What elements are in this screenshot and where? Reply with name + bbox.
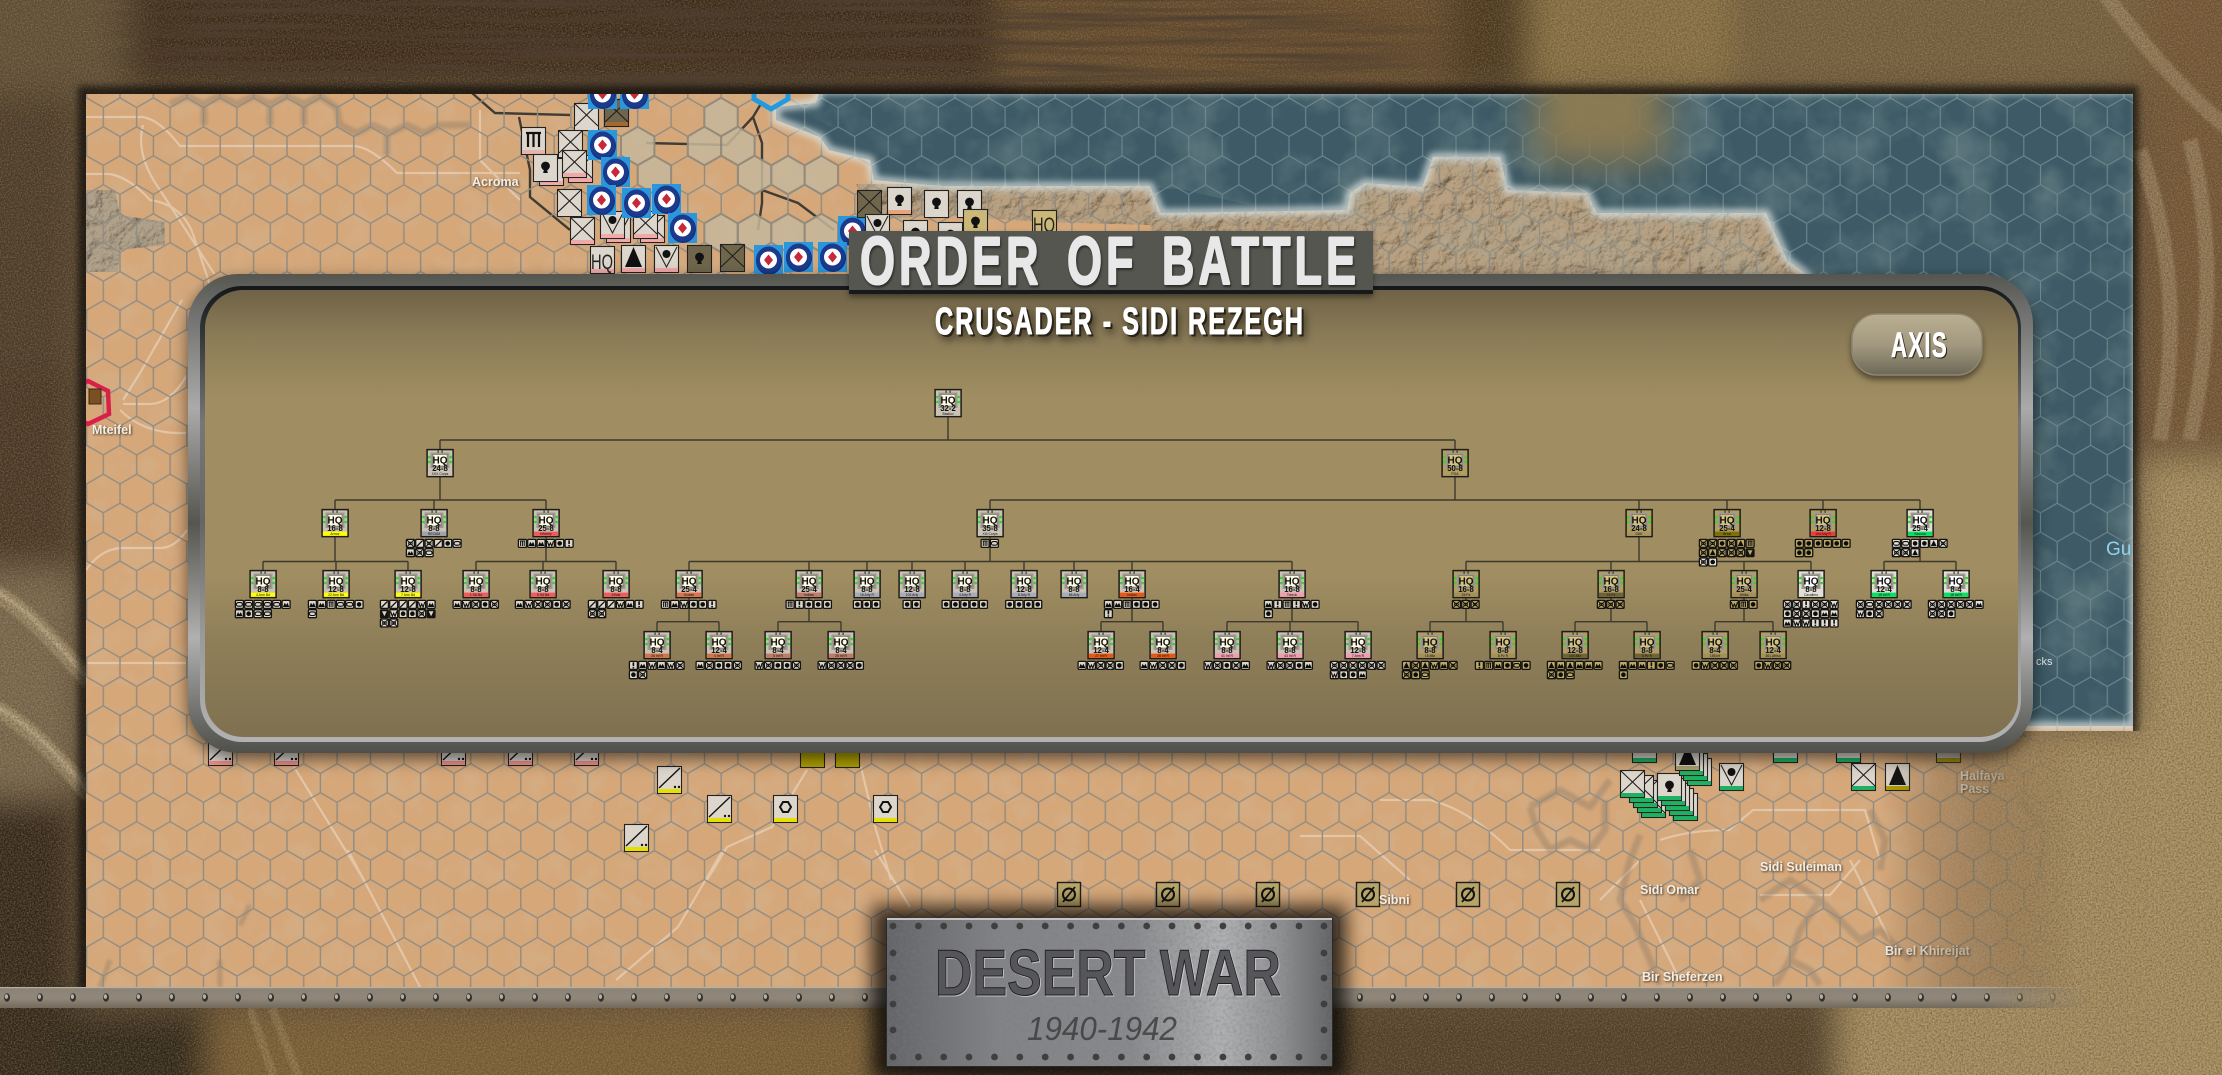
HQ 8-8 Cavallero: HQ: [1804, 576, 1819, 588]
map: sea mottling: [770, 94, 2133, 726]
HQ 8-4 NZ brigade: 26 Inf R: [651, 654, 663, 658]
bottom riveted metal rail: [0, 987, 2222, 1008]
HQ 8-4 155th regiment: [1692, 632, 1737, 669]
HQ 8-8 SA support: [588, 571, 643, 618]
HQ 12-8 arty: 12-8: [904, 585, 920, 594]
HQ 12-4 361st regiment: [1755, 632, 1791, 669]
heading: order of battle: [849, 223, 1373, 299]
HQ 8-8 Tobruk brigade: HQ: [1282, 638, 1298, 648]
HQ 25-8 infantry with units: [518, 510, 573, 547]
HQ 35-8 XIII Corps: [977, 510, 1003, 547]
HQ 12-4 NZ brigade: 4 Inf R: [714, 654, 725, 658]
map: place names: Bir el Khireijat: [1885, 944, 1971, 958]
HQ 16-8 21st Panzer: HQ: [1604, 576, 1619, 588]
HQ 16-4 Freyberg: [1104, 571, 1159, 618]
HQ 8-4 Savona infantry: 8-4: [1950, 585, 1962, 594]
HQ 24-8 Afrika Korps: [1626, 510, 1652, 537]
map: desert ground: [86, 94, 2133, 987]
HQ 8-4 Savona infantry: [1928, 571, 1983, 618]
HQ 8-4 NZ brigade: HQ: [650, 638, 665, 648]
map: place names: Sidi Suleiman: [1760, 860, 1842, 874]
org chart: third echelon: [322, 510, 1947, 566]
HQ 8-8 8th Panzer regiment: HQ: [1496, 638, 1511, 648]
HQ 8-4 Indian brigade: [1140, 632, 1185, 669]
HQ 16-8 Tobruk: HQ: [1284, 576, 1300, 588]
HQ 8-8 1 SA Bde: 8-8: [470, 585, 482, 594]
HQ 12-8 7 Arm Bde: 7 Arm Bd: [401, 593, 415, 597]
button: axis: AXIS: [1891, 326, 1948, 365]
HQ 8-8 arty: 68 Arty: [1069, 593, 1080, 597]
HQ 12-8 7 Arm Bde: HQ: [400, 576, 416, 588]
org chart: fourth echelon, allied west: [235, 571, 643, 627]
heading: order of battle: ORDER OF BATTLE: [860, 223, 1360, 299]
HQ 16-8 15th Panzer: 15.Pz: [1462, 593, 1471, 597]
HQ 8-8 15th Panzer regiment: 8-8: [1424, 646, 1436, 655]
HQ 12-8 Tobruk armor: 7 Arm R: [1352, 654, 1365, 658]
HQ 24-8 XXX Corps: 24-8: [432, 464, 448, 473]
HQ 25-4 Afrika division: Afrika: [1740, 593, 1748, 597]
HQ 12-8 104th regiment: 12-8: [1567, 646, 1583, 655]
HQ 8-8 5 SA Bde: 8-8: [537, 585, 549, 594]
HQ 8-8 SA support: HQ: [608, 576, 624, 588]
HQ 12-4 NZ brigade: 12-4: [711, 646, 727, 655]
map: Italian slash and garrison counters: [624, 766, 898, 852]
map: sea: [776, 90, 2140, 726]
HQ 25-8 infantry with units: 25-8: [538, 524, 554, 533]
HQ 12-4 Savona infantry: [1856, 571, 1911, 618]
HQ 8-4 NZ brigade: 8-4: [772, 646, 784, 655]
HQ 50-8 Panzer Group: PGA: [1451, 472, 1459, 476]
HQ 8-8 4 Arm Bde: [235, 571, 290, 618]
org chart: fifth echelon, axis: [1402, 632, 1791, 679]
HQ 12-4 361st regiment: 12-4: [1765, 646, 1781, 655]
HQ 25-4 New Zealand: Scobie: [684, 593, 694, 597]
HQ 16-4 Freyberg: HQ: [1124, 576, 1140, 588]
HQ 8-8 arty: 8-8: [1068, 585, 1080, 594]
HQ 32-2 army command: 32-2: [940, 404, 956, 413]
map: Allied and Axis counters around Tobruk: HQ: [591, 251, 613, 274]
HQ 8-8 arty: [853, 571, 880, 608]
HQ 8-8 8th Panzer regiment: 8.Pz R: [1498, 654, 1509, 658]
HQ 12-8 7 Arm Bde: 12-8: [400, 585, 416, 594]
HQ 24-8 XXX Corps: [427, 450, 453, 477]
HQ 8-8 SA support: 8-8: [610, 585, 622, 594]
HQ 12-8 with units: 104 Arty R: [1815, 532, 1831, 536]
HQ 12-4 Indian brigade: [1078, 632, 1123, 669]
HQ 8-4 Indian brigade: 8-4: [1157, 646, 1169, 655]
HQ 8-4 155th regiment: 155.Inf: [1710, 654, 1720, 658]
map: Allied and Axis counters around Tobruk: [522, 79, 1056, 275]
HQ 8-8 5th Panzer regiment: 8-8: [1641, 646, 1653, 655]
org chart: fourth echelon, XIII Corps: [661, 571, 1319, 618]
HQ 8-8 arty: [942, 571, 987, 608]
HQ 8-4 NZ brigade: 8-4: [835, 646, 847, 655]
HQ 12-8 104th regiment: 104.Mtz: [1569, 654, 1581, 658]
map: rough sandy hexes: [621, 98, 838, 252]
HQ 8-8 Cavallero: Cavallero: [1804, 593, 1818, 597]
map: ground mottling: [86, 94, 1925, 987]
HQ 25-4 New Zealand: 25-4: [681, 585, 697, 594]
HQ 8-8 4 Arm Bde: 4 Arm Bd: [256, 593, 270, 597]
HQ 12-8 22 Arm Bde: HQ: [328, 576, 344, 588]
HQ 8-4 155th regiment: 8-4: [1709, 646, 1721, 655]
HQ 8-8 arty: HQ: [860, 576, 875, 588]
map: place names: Halfaya: [1960, 769, 2006, 783]
map: row of axis fort counters: [1058, 882, 1580, 906]
HQ 8-8 Tobruk brigade: [1204, 632, 1249, 669]
HQ 8-8 Recon with units: [406, 510, 461, 557]
HQ 8-8 Tobruk brigade: 8-8: [1221, 646, 1233, 655]
HQ 8-8 Recon with units: 8-8: [428, 524, 440, 533]
HQ 32-2 army command: HQ: [940, 396, 956, 406]
HQ 12-8 arty: HQ: [1016, 576, 1032, 588]
HQ 16-8 Tobruk: Tobruk: [1287, 593, 1297, 597]
HQ 12-8 arty: 8 Arty R: [1018, 593, 1031, 597]
HQ 8-4 NZ brigade: [629, 632, 684, 679]
button: axis: [1852, 314, 1982, 375]
map: place names: cks: [2036, 656, 2053, 668]
HQ 16-8 Armor: Armor: [330, 532, 340, 536]
map: place names: Bir Sheferzen: [1642, 970, 1723, 984]
HQ 12-4 361st regiment: 361.Afrika: [1765, 654, 1781, 658]
HQ 8-8 15th Panzer regiment: 15.Mtz: [1425, 654, 1435, 658]
map: place names: Mteifel: [92, 423, 132, 437]
HQ 16-8 Tobruk: [1264, 571, 1319, 618]
HQ 8-4 Indian brigade: HQ: [1156, 638, 1171, 648]
HQ 12-8 104th regiment: [1547, 632, 1602, 679]
HQ 12-8 arty: HQ: [904, 576, 920, 588]
HQ 8-8 1 SA Bde: 1 SA Bd: [470, 593, 482, 597]
HQ 25-4 brigade: HQ: [802, 576, 817, 588]
org chart: fourth echelon, axis: [1452, 571, 1983, 627]
HQ 8-8 8th Panzer regiment: 8-8: [1497, 646, 1509, 655]
HQ 12-4 Savona infantry: HQ: [1876, 576, 1892, 588]
HQ 8-4 155th regiment: HQ: [1708, 638, 1723, 648]
panel: tan surface: [205, 290, 2018, 737]
org chart: army group and corps: [427, 390, 1468, 477]
map: escarpment ridges: [100, 96, 2045, 987]
map: worn burlap patch over the sea: [1535, 60, 1665, 165]
HQ 8-8 Tobruk brigade: [1267, 632, 1312, 669]
map: place names: Sidi Omar: [1640, 883, 1699, 897]
HQ 32-2 army command: Bastico: [942, 412, 954, 416]
HQ 24-8 Afrika Korps: HQ: [1632, 516, 1647, 526]
HQ 50-8 Panzer Group: 50-8: [1447, 464, 1463, 473]
HQ 8-8 5th Panzer regiment: HQ: [1640, 638, 1655, 648]
HQ 25-8 infantry with units: Infantry: [540, 532, 552, 536]
HQ 8-8 Tobruk brigade: 8-8: [1284, 646, 1296, 655]
HQ 16-8 15th Panzer: 16-8: [1458, 585, 1474, 594]
HQ 8-8 arty: 16 Arty R: [860, 593, 875, 597]
HQ 8-4 NZ brigade: 5 Inf R: [773, 654, 784, 658]
map: land hex grid: [86, 94, 2133, 987]
map: counters partly hidden under the panel: [208, 696, 860, 768]
HQ 12-4 361st regiment: HQ: [1766, 638, 1781, 648]
map: place names: Acroma: [472, 175, 520, 189]
map edge shadow: [78, 86, 2138, 991]
HQ 12-4 Indian brigade: 12-4: [1093, 646, 1109, 655]
HQ 8-8 arty: HQ: [1066, 576, 1082, 588]
plate rivets: [890, 923, 1327, 1060]
HQ 12-8 Tobruk armor: 12-8: [1350, 646, 1366, 655]
HQ 25-4 New Zealand: [661, 571, 716, 608]
HQ 8-4 NZ brigade: HQ: [834, 638, 849, 648]
HQ 12-8 7 Arm Bde: [380, 571, 435, 627]
HQ 35-8 XIII Corps: XIII Corps: [982, 532, 998, 536]
map: Allied and Axis counters around Tobruk: HQ: [1033, 214, 1055, 237]
HQ 12-8 with units: 12-8: [1815, 524, 1831, 533]
HQ 8-4 Savona infantry: 16 Inf R: [1950, 593, 1962, 597]
HQ 16-4 Freyberg: 16-4: [1124, 585, 1140, 594]
HQ 16-8 15th Panzer: HQ: [1458, 576, 1474, 588]
map: rocky coastal plateau: [856, 157, 1806, 274]
HQ 32-2 army command: [935, 390, 961, 417]
HQ 25-4 Italian armor with units: HQ: [1720, 516, 1735, 526]
HQ 8-4 NZ brigade: [755, 632, 800, 669]
HQ 12-8 arty: [899, 571, 925, 608]
HQ 16-8 Armor: HQ: [328, 516, 343, 526]
HQ 8-8 5th Panzer regiment: 5.Pz R: [1642, 654, 1653, 658]
HQ 12-8 22 Arm Bde: [308, 571, 363, 618]
panel: inner rim: [200, 286, 2021, 742]
HQ 12-8 Tobruk armor: HQ: [1350, 638, 1366, 648]
date text: 1940-1942: 1940-1942: [1027, 1010, 1177, 1047]
HQ 8-4 NZ brigade: 8-4: [651, 646, 663, 655]
HQ 12-8 arty: [1006, 571, 1042, 608]
HQ 12-4 Indian brigade: HQ: [1094, 638, 1109, 648]
panel: metal bezel: [188, 274, 2033, 753]
HQ 8-8 arty: 8-8: [861, 585, 873, 594]
HQ 8-8 1 SA Bde: HQ: [468, 576, 484, 588]
HQ 12-8 with units: HQ: [1816, 516, 1831, 526]
HQ 12-8 Tobruk armor: [1330, 632, 1385, 679]
HQ 16-8 21st Panzer: 16-8: [1603, 585, 1619, 594]
map: shoreline surf: [776, 90, 2140, 726]
HQ 25-4 Afrika division: 25-4: [1736, 585, 1752, 594]
HQ 8-8 Recon with units: HQ: [426, 516, 442, 526]
HQ 24-8 XXX Corps: XXX Corps: [432, 472, 449, 476]
map: place names: Pass: [1960, 782, 1989, 796]
HQ 8-8 Recon with units: RECAM: [428, 532, 440, 536]
HQ 24-8 Afrika Korps: 24-8: [1631, 524, 1647, 533]
map: place names: Sibni: [1379, 893, 1410, 907]
HQ 8-8 Tobruk brigade: 43 Inf R: [1284, 654, 1296, 658]
HQ 8-8 4 Arm Bde: HQ: [256, 576, 271, 588]
HQ 8-4 Savona infantry: HQ: [1948, 576, 1964, 588]
HQ 24-8 XXX Corps: HQ: [432, 456, 448, 466]
HQ 16-8 21st Panzer: [1597, 571, 1624, 608]
logo plate: Desert War 1940-1942: [872, 906, 1346, 1075]
map: port marker: [754, 70, 788, 109]
HQ 8-8 5 SA Bde: HQ: [536, 576, 551, 588]
HQ 25-4 brigade: 25-4: [801, 585, 817, 594]
HQ 35-8 XIII Corps: HQ: [982, 516, 998, 526]
HQ 8-8 Tobruk brigade: HQ: [1220, 638, 1235, 648]
HQ 12-8 with units: [1795, 510, 1850, 557]
HQ 8-8 arty: 8-8: [959, 585, 971, 594]
HQ 8-8 arty: [1061, 571, 1087, 598]
HQ 25-4 Afrika division: [1730, 571, 1757, 608]
map: place names: Gu: [2106, 539, 2131, 560]
HQ 16-4 Freyberg: Indian: [1127, 593, 1137, 597]
HQ 16-8 15th Panzer: [1452, 571, 1479, 608]
map: place names: [92, 175, 2131, 984]
HQ 25-4 Savona with units: [1892, 510, 1947, 557]
HQ 12-4 NZ brigade: [696, 632, 741, 669]
HQ 16-8 Armor: [322, 510, 348, 537]
subtitle: CRUSADER - SIDI REZEGH: [935, 301, 1305, 343]
HQ 12-4 Indian brigade: 27 Inf R: [1095, 654, 1107, 658]
HQ 50-8 Panzer Group: [1442, 450, 1468, 477]
HQ 8-8 Cavallero: 8-8: [1805, 585, 1817, 594]
map: sea hex grid: [776, 90, 2140, 726]
HQ 8-4 Indian brigade: 28 Inf R: [1157, 654, 1169, 658]
HQ 12-4 NZ brigade: HQ: [712, 638, 727, 648]
HQ 8-8 arty: 4 Arty R: [959, 593, 972, 597]
HQ 8-8 15th Panzer regiment: [1402, 632, 1457, 679]
panel: order of battle: [188, 274, 2033, 753]
map: white tracks: [86, 110, 1890, 987]
HQ 12-4 Savona infantry: 15 Inf R: [1878, 593, 1890, 597]
HQ 8-8 15th Panzer regiment: HQ: [1422, 638, 1438, 648]
HQ 12-8 arty: 12-8: [1016, 585, 1032, 594]
HQ 35-8 XIII Corps: 35-8: [982, 524, 998, 533]
HQ 25-4 Afrika division: HQ: [1736, 576, 1752, 588]
map: besieged town marker: [68, 381, 109, 424]
HQ 8-8 Tobruk brigade: 41 Inf R: [1221, 654, 1233, 658]
HQ 8-8 8th Panzer regiment: [1475, 632, 1530, 669]
HQ 16-8 Tobruk: 16-8: [1284, 585, 1300, 594]
HQ 25-4 Italian armor with units: Brzal: [1723, 532, 1731, 536]
HQ 25-4 brigade: [786, 571, 831, 608]
HQ 8-8 5 SA Bde: 5 SA Bd: [537, 593, 549, 597]
HQ 24-8 Afrika Korps: DAK: [1636, 532, 1643, 536]
map: frontier counter stacks: [1620, 736, 1960, 820]
HQ 25-4 Savona with units: Savona: [1914, 532, 1926, 536]
HQ 8-8 4 Arm Bde: 8-8: [257, 585, 269, 594]
HQ 50-8 Panzer Group: HQ: [1448, 456, 1463, 466]
HQ 25-4 Savona with units: HQ: [1912, 516, 1928, 526]
HQ 8-8 arty: HQ: [958, 576, 973, 588]
HQ 8-8 1 SA Bde: [453, 571, 498, 608]
HQ 25-4 Italian armor with units: 25-4: [1719, 524, 1735, 533]
HQ 12-8 arty: 102 Arty: [906, 593, 919, 597]
map: rocky hills on the west edge: [86, 190, 165, 272]
HQ 25-4 brigade: Indian: [804, 593, 814, 597]
org chart connector lines: [263, 417, 1956, 631]
HQ 8-8 Cavallero: [1783, 571, 1838, 627]
HQ 8-4 NZ brigade: [818, 632, 863, 669]
HQ 8-8 SA support: 6 Bde: [612, 593, 621, 597]
HQ 12-8 104th regiment: HQ: [1568, 638, 1583, 648]
HQ 8-4 NZ brigade: 25 Inf R: [835, 654, 847, 658]
org chart: fifth echelon, allied: [629, 632, 1385, 679]
HQ 25-4 New Zealand: HQ: [682, 576, 697, 588]
map: dark roads: [472, 93, 834, 230]
HQ 25-8 infantry with units: HQ: [538, 516, 554, 526]
HQ 16-8 Armor: 16-8: [327, 524, 343, 533]
HQ 12-8 22 Arm Bde: 12-8: [328, 585, 344, 594]
HQ 12-4 Savona infantry: 12-4: [1876, 585, 1892, 594]
HQ 12-8 22 Arm Bde: 22 Arm Bd: [328, 593, 344, 597]
title text: Desert War: DESERT WAR: [935, 936, 1281, 1009]
HQ 25-4 Savona with units: 25-4: [1912, 524, 1928, 533]
HQ 8-4 NZ brigade: HQ: [770, 638, 786, 648]
HQ 25-4 Italian armor with units: [1699, 510, 1754, 566]
HQ 8-8 5th Panzer regiment: [1619, 632, 1674, 679]
HQ 16-8 21st Panzer: 21.Pz: [1607, 593, 1616, 597]
HQ 8-8 5 SA Bde: [515, 571, 570, 608]
